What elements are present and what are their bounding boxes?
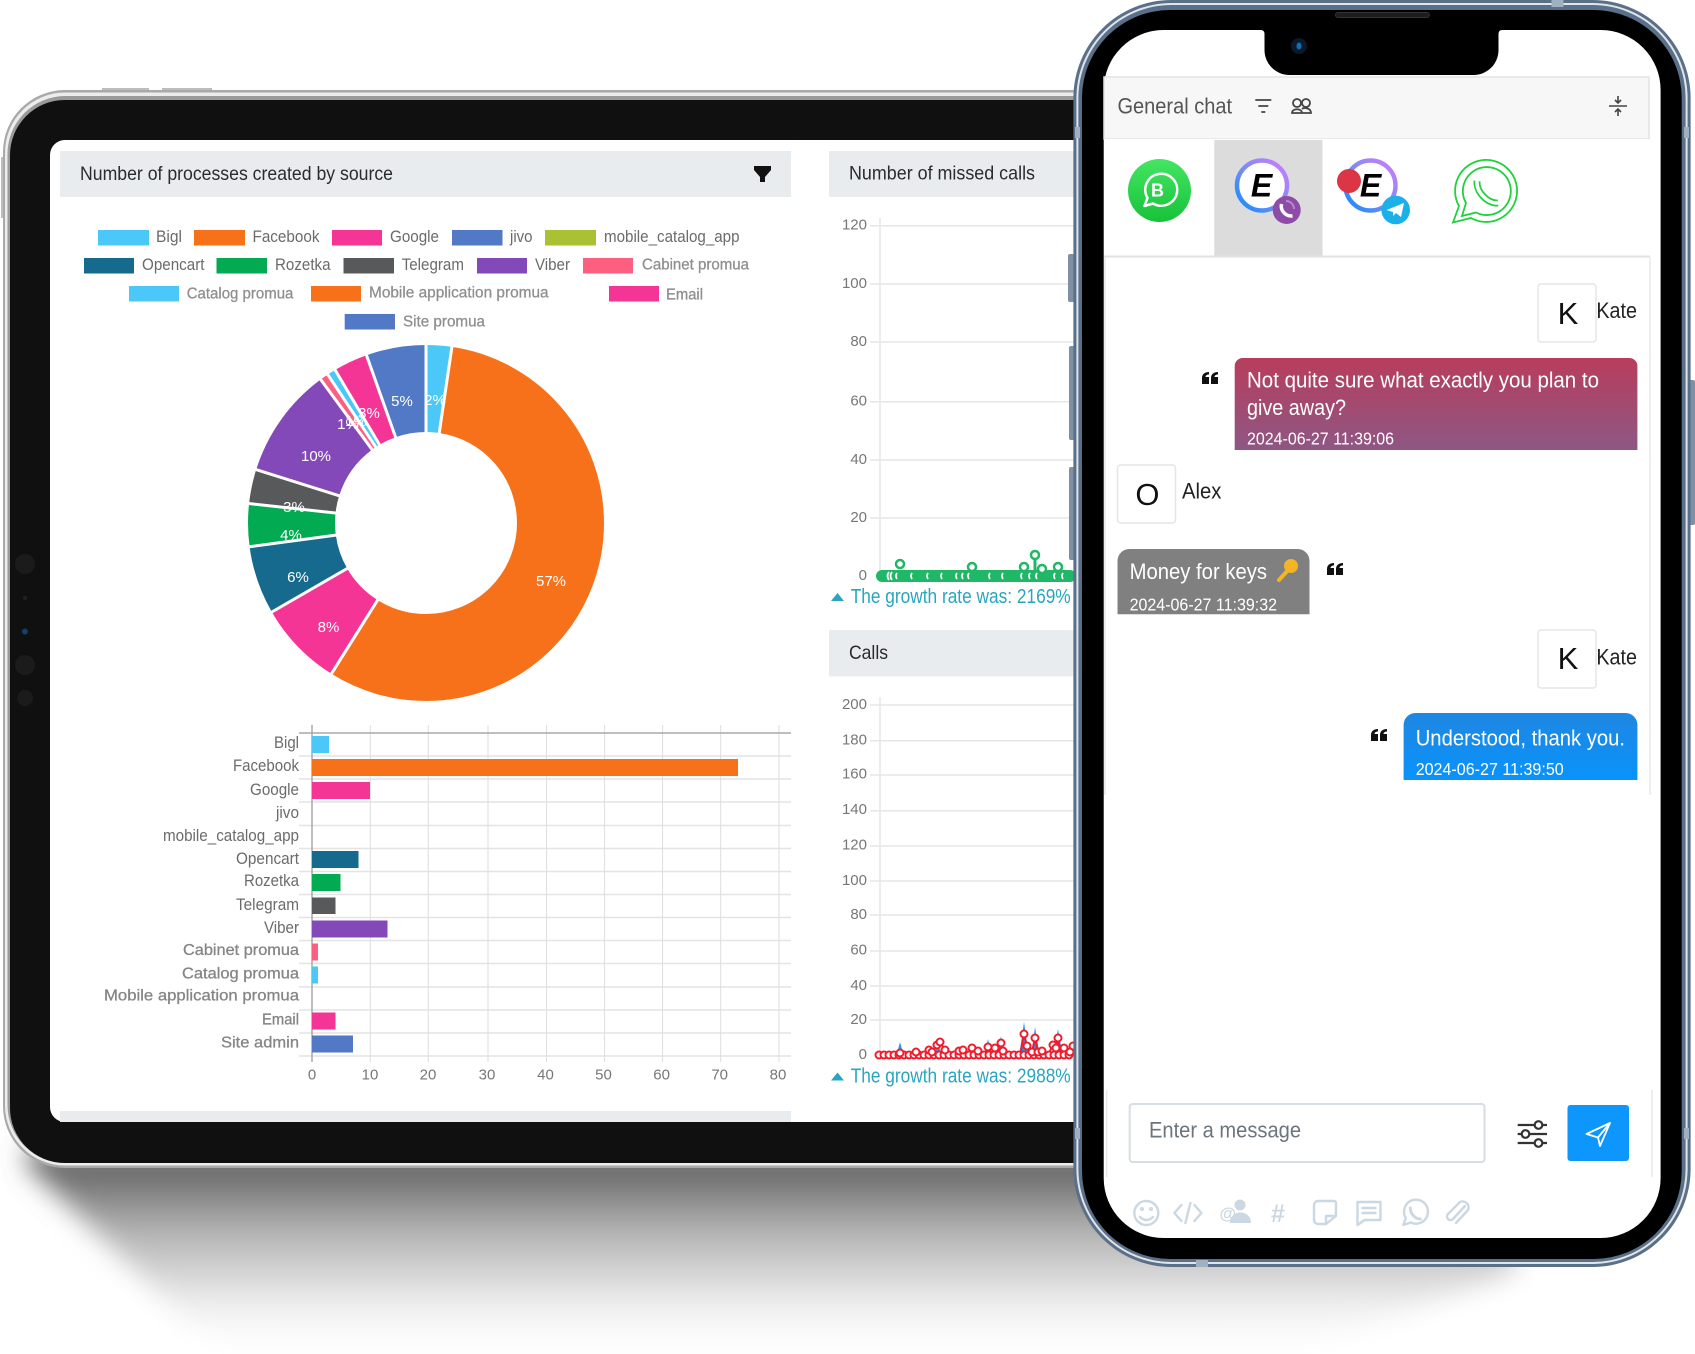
message bubble: Kate thanks: Understood, thank you. xyxy=(1416,726,1625,750)
chart legend: Google xyxy=(390,228,439,246)
line chart: calls: 160 xyxy=(842,766,867,782)
horizontal bar chart: Rozetka xyxy=(244,872,300,890)
horizontal bar chart: Catalog promua xyxy=(182,966,299,982)
horizontal bar chart: jivo xyxy=(275,804,299,822)
line chart: missed calls xyxy=(842,216,1090,584)
icon: smile xyxy=(1134,1201,1158,1225)
icon: quote 1 xyxy=(1202,372,1218,384)
panel heading: processes by source xyxy=(60,151,791,197)
icon: hashtag: # xyxy=(1271,1200,1285,1228)
message: Alex avatar: Alex xyxy=(1182,478,1221,504)
tablet device xyxy=(1,88,1203,1168)
horizontal bar chart: Telegram xyxy=(236,896,299,914)
message bubble: Kate question: 2024-06-27 11:39:06 xyxy=(1247,428,1394,448)
horizontal bar chart: 60 xyxy=(653,1066,670,1084)
message bubble: Kate question xyxy=(1235,358,1637,450)
button: send xyxy=(1568,1105,1629,1161)
growth rate: missed calls: The growth rate was: 2169% xyxy=(851,586,1071,608)
horizontal bar chart: 50 xyxy=(595,1066,612,1084)
horizontal bar chart: Opencart xyxy=(236,850,299,868)
panel heading: processes by source: Number of processes created by source xyxy=(80,163,393,185)
horizontal bar chart xyxy=(104,725,791,1084)
donut chart xyxy=(246,342,566,676)
message: Kate avatar 1: Kate xyxy=(1596,298,1637,323)
message bubble: Kate question: give away? xyxy=(1247,395,1346,420)
icon: WhatsApp Business xyxy=(1128,159,1191,222)
donut chart: 1% xyxy=(337,416,359,433)
icon: whatsapp xyxy=(1403,1200,1428,1225)
tablet screen xyxy=(50,140,1150,1122)
phone frame xyxy=(1073,0,1691,1267)
message bubble: Alex reply: 2024-06-27 11:39:32 xyxy=(1130,594,1277,614)
icon: WhatsApp outline xyxy=(1453,160,1517,222)
donut chart: 10% xyxy=(301,448,331,465)
chart legend: mobile_catalog_app xyxy=(604,228,740,246)
chart legend: Cabinet promua xyxy=(642,256,749,274)
chart legend: jivo xyxy=(509,228,532,246)
line chart: calls: 0 xyxy=(859,1046,867,1063)
horizontal bar chart: Email xyxy=(262,1012,299,1028)
message: Alex avatar xyxy=(1118,465,1221,523)
panel: processes by source xyxy=(60,151,791,1122)
chat channel tabs xyxy=(1104,139,1650,257)
tablet top buttons xyxy=(1,88,212,218)
chart legend: Opencart xyxy=(142,256,205,274)
chart legend: Catalog promua xyxy=(187,286,293,302)
chart legend: Bigl xyxy=(156,228,182,246)
line chart: missed calls: 80 xyxy=(850,333,867,350)
icon: group of users xyxy=(1292,99,1311,113)
message input xyxy=(1130,1104,1484,1162)
growth rate: calls: The growth rate was: 2988% xyxy=(851,1066,1071,1088)
line chart: missed calls: 40 xyxy=(850,451,867,468)
icon: collapse xyxy=(1609,96,1627,116)
message bubble: Alex reply xyxy=(1118,549,1310,614)
donut chart: 2% xyxy=(424,392,446,409)
line chart: calls: 120 xyxy=(842,836,867,854)
chat header xyxy=(1104,77,1649,139)
icon: settings sliders xyxy=(1518,1121,1547,1147)
icon: chat xyxy=(1358,1202,1380,1225)
chart legend: Facebook xyxy=(252,228,320,246)
icon: mention user: @ xyxy=(1220,1204,1236,1223)
horizontal bar chart: 30 xyxy=(479,1066,495,1084)
line chart: missed calls: 0 xyxy=(859,567,867,584)
chart legend: Site promua xyxy=(403,314,485,330)
phone device xyxy=(1068,0,1695,1267)
donut chart: 57% xyxy=(536,573,566,590)
message: Alex avatar: O xyxy=(1135,477,1159,512)
line chart: calls: 20 xyxy=(850,1011,867,1028)
toolbar icons xyxy=(1134,1200,1469,1228)
horizontal bar chart: Viber xyxy=(264,919,299,937)
line chart: calls: 140 xyxy=(842,801,867,818)
message bubble: Kate thanks xyxy=(1404,713,1637,780)
panel: missed calls xyxy=(829,151,1129,608)
line chart: calls xyxy=(842,696,1090,1063)
donut chart: 5% xyxy=(391,393,413,410)
chat header: General chat xyxy=(1118,94,1232,118)
panel heading: calls: Calls xyxy=(849,642,888,664)
horizontal bar chart: Google xyxy=(250,781,299,799)
donut chart: 8% xyxy=(318,619,339,636)
line chart: missed calls: 120 xyxy=(842,216,867,234)
phone notch xyxy=(1261,30,1502,75)
message: Kate avatar 2 xyxy=(1538,630,1637,688)
message: Kate avatar 1: K xyxy=(1558,296,1579,331)
line chart: missed calls: 100 xyxy=(842,275,867,292)
horizontal bar chart: mobile_catalog_app xyxy=(163,827,299,845)
phone speaker xyxy=(1335,12,1429,18)
icon: quote 2 xyxy=(1327,563,1343,575)
donut chart: 6% xyxy=(287,569,309,586)
panel heading: missed calls xyxy=(829,151,1129,197)
horizontal bar chart: Bigl xyxy=(274,734,299,752)
icon: quote 3 xyxy=(1371,729,1387,741)
horizontal bar chart: Site admin xyxy=(221,1034,299,1052)
line chart: calls: 60 xyxy=(850,942,867,958)
panel: calls xyxy=(829,630,1129,1088)
phone front camera xyxy=(1291,38,1307,54)
icon: filter lines xyxy=(1255,100,1271,112)
icon: key xyxy=(1279,560,1297,580)
donut chart: 3% xyxy=(358,405,380,422)
horizontal bar chart: 20 xyxy=(420,1066,436,1084)
icon: WhatsApp Business: B xyxy=(1151,180,1164,200)
donut chart: 4% xyxy=(280,527,302,544)
icon: sticky note xyxy=(1314,1201,1336,1224)
horizontal bar chart: 80 xyxy=(770,1066,786,1084)
line chart: missed calls: 20 xyxy=(850,509,867,526)
horizontal bar chart: 70 xyxy=(711,1066,728,1084)
message input: Enter a message xyxy=(1149,1118,1301,1142)
message: Kate avatar 1 xyxy=(1538,284,1637,342)
line chart: calls: 100 xyxy=(842,872,867,889)
tablet cameras and sensors xyxy=(15,554,35,706)
phone screen xyxy=(1104,30,1661,1238)
line chart: calls: 180 xyxy=(842,732,867,748)
horizontal bar chart: Mobile application promua xyxy=(104,988,299,1004)
line chart: missed calls: 60 xyxy=(850,392,867,410)
chart legend: Mobile application promua xyxy=(369,284,549,302)
horizontal bar chart: Cabinet promua xyxy=(183,942,299,959)
icon: E Viber channel: E xyxy=(1251,168,1274,204)
next panel heading strip xyxy=(60,1111,791,1122)
horizontal bar chart: 40 xyxy=(537,1066,554,1084)
icon: E Viber channel xyxy=(1237,160,1301,224)
line chart: calls: 80 xyxy=(850,906,867,923)
icon: mention user xyxy=(1220,1200,1251,1223)
horizontal bar chart: Facebook xyxy=(233,757,300,775)
horizontal bar chart: 10 xyxy=(362,1066,378,1084)
message: Kate avatar 2: Kate xyxy=(1596,644,1637,670)
panel heading: missed calls: Number of missed calls xyxy=(849,162,1035,184)
icon: filter funnel xyxy=(754,166,771,182)
chart legend: Email xyxy=(666,286,703,304)
phone side buttons xyxy=(1068,254,1695,560)
chart legend: Telegram xyxy=(402,256,464,274)
icon: paperclip xyxy=(1447,1201,1469,1223)
tablet frame xyxy=(3,90,1203,1168)
chart legend xyxy=(84,228,749,330)
horizontal bar chart: 0 xyxy=(308,1066,316,1084)
frame side lines xyxy=(1105,257,1652,1177)
icon: E Telegram channel: E xyxy=(1360,168,1383,204)
line chart: calls: 40 xyxy=(850,977,867,994)
line chart: calls: 200 xyxy=(842,696,867,713)
donut chart: 1% xyxy=(345,413,367,430)
drop shadow under devices xyxy=(22,1150,1515,1354)
icon: E Telegram channel xyxy=(1337,160,1410,224)
message bubble: Kate thanks: 2024-06-27 11:39:50 xyxy=(1416,759,1564,779)
message bubble: Kate question: Not quite sure what exactly you plan to xyxy=(1247,368,1599,392)
message: Kate avatar 2: K xyxy=(1558,641,1579,676)
chart legend: Rozetka xyxy=(275,256,331,274)
message bubble: Alex reply: Money for keys xyxy=(1130,559,1267,584)
donut chart: 3% xyxy=(283,499,305,516)
panel heading: calls xyxy=(829,630,1129,676)
chart legend: Viber xyxy=(535,256,570,274)
icon: code xyxy=(1174,1203,1201,1223)
